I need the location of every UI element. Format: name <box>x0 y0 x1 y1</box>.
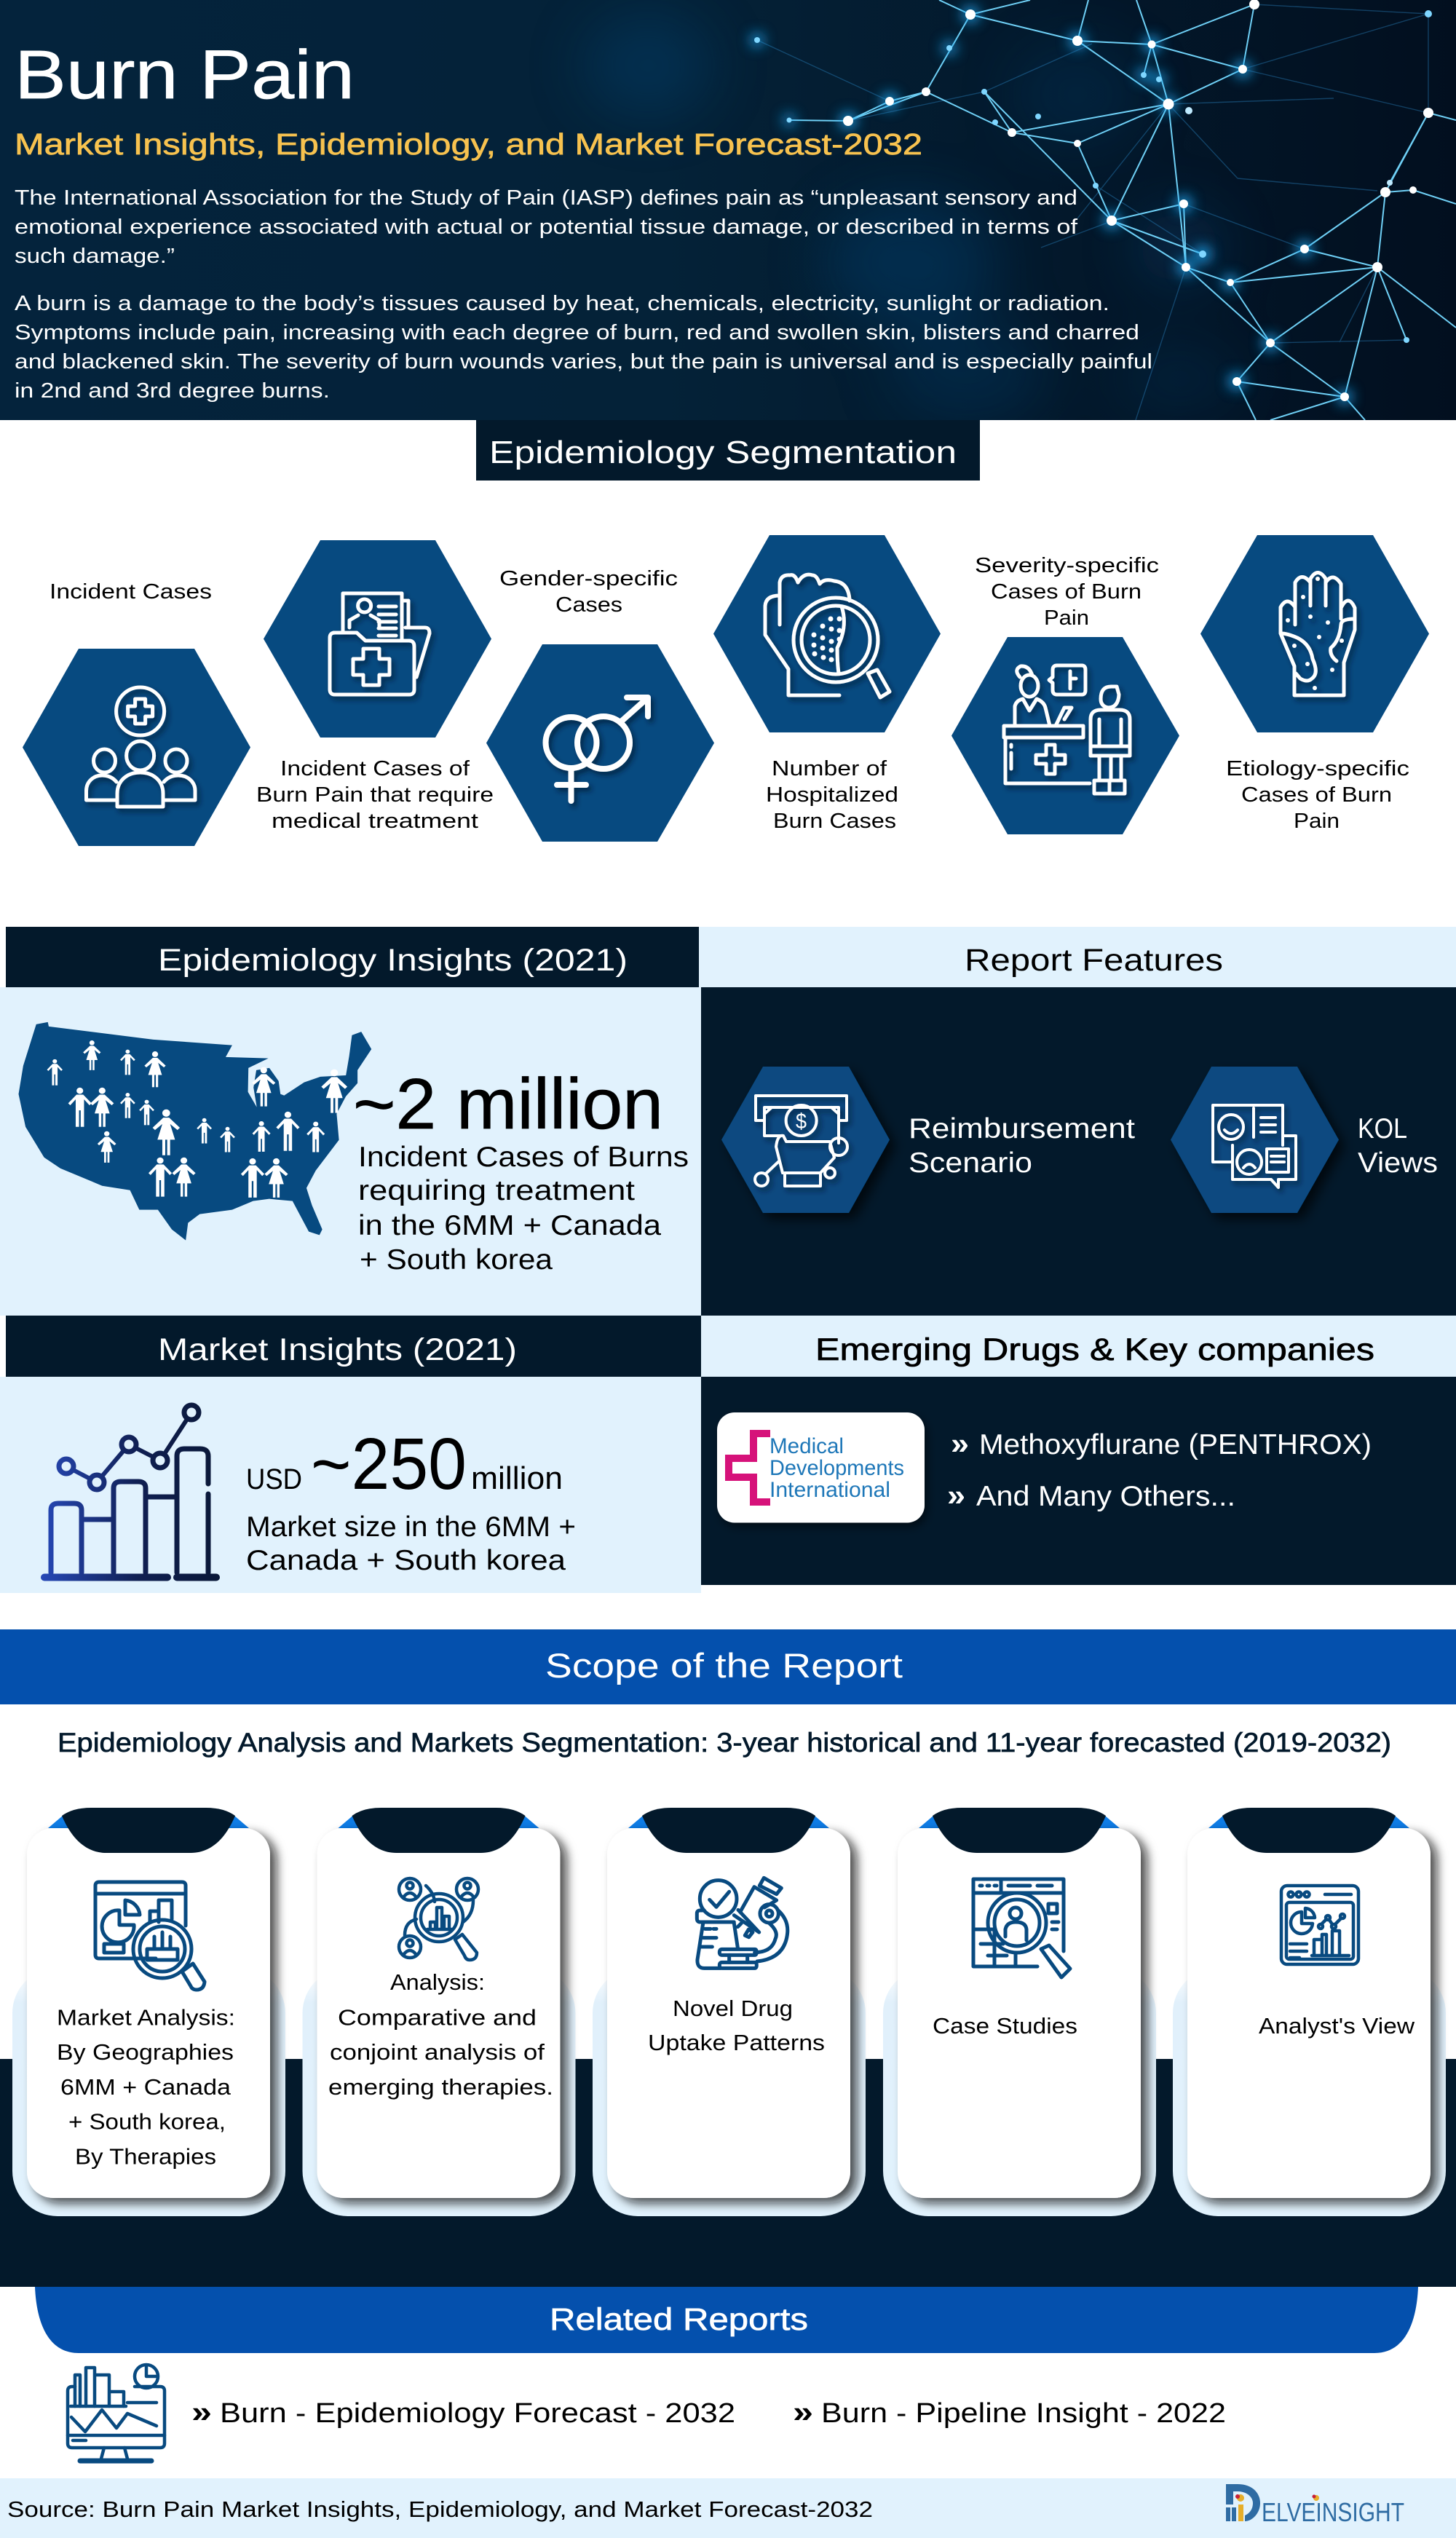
label: Reimbursement Scenario: Reimbursement <box>909 1113 1135 1145</box>
heading: Report Features: Report Features <box>965 943 1223 978</box>
label: Incident Cases of Burn Pain that require medical treatment: medical treatment <box>272 810 478 833</box>
heading: Epidemiology Insights: Epidemiology Insights (2021) <box>158 943 628 978</box>
label: Number of Hospitalized Burn Cases <box>766 757 898 833</box>
icon: cash dispenser with hand: $ <box>796 1110 807 1134</box>
text block: IASP definition: such damage.” <box>15 245 175 268</box>
panel: market insights <box>0 1316 701 1593</box>
text block: market size description: Market size in the 6MM + <box>246 1511 576 1543</box>
heading: Report Features <box>699 927 1456 987</box>
logo card: Medical Developments International: International <box>769 1478 890 1502</box>
label: Reimbursement Scenario: Scenario <box>909 1147 1032 1179</box>
text block: incident cases description: + South korea <box>360 1244 553 1276</box>
label: Etiology-specific Cases of Burn Pain: Cases of Burn <box>1241 783 1392 807</box>
text: market analysis details: 6MM + Canada <box>60 2074 232 2100</box>
banner: Related Reports <box>35 2287 1418 2353</box>
subtitle: Market Insights, Epidemiology, and Market Forecast-2032 <box>15 127 922 161</box>
list: related reports: » <box>191 2395 212 2429</box>
heading: Market Insights <box>6 1316 701 1377</box>
label: Gender-specific Cases: Cases <box>555 593 622 617</box>
list: related reports: Burn - Epidemiology Forecast - 2032 <box>220 2398 735 2429</box>
label: Severity-specific Cases of Burn Pain <box>975 554 1159 630</box>
icon: web page under magnifier <box>973 1879 1070 1977</box>
icon: feedback bubbles <box>1213 1105 1296 1187</box>
stat: USD ~250 million <box>246 1423 563 1505</box>
text: comparative analysis details: conjoint analysis of <box>330 2039 545 2065</box>
icon: gender symbols <box>546 697 648 801</box>
card: market analysis <box>12 1808 285 2216</box>
text: comparative analysis details: emerging therapies. <box>328 2074 553 2100</box>
icon: flask and microscope <box>697 1878 788 1968</box>
heading: Emerging Drugs and Key companies: Emerging Drugs & Key companies <box>815 1332 1374 1367</box>
logo: DelveInsight: ELVEINSIGHT <box>1262 2497 1404 2527</box>
label: Etiology-specific Cases of Burn Pain: Etiology-specific <box>1226 757 1409 780</box>
text block: incident cases description: Incident Cases of Burns <box>358 1142 689 1173</box>
card: comparative analysis <box>303 1808 575 2216</box>
label: Incident Cases of Burn Pain that require medical treatment <box>256 757 494 833</box>
hexagon: gender-specific cases <box>486 644 714 842</box>
label: Incident Cases of Burn Pain that require medical treatment: Burn Pain that require <box>256 783 494 807</box>
title: Burn Pain <box>15 36 355 114</box>
text block: market size description: Canada + South korea <box>246 1545 566 1576</box>
label: Number of Hospitalized Burn Cases: Number of <box>772 757 887 780</box>
icon: cash dispenser with hand <box>755 1096 847 1186</box>
panel: emerging drugs and key companies <box>701 1316 1456 1585</box>
text: market analysis details: + South korea, <box>68 2108 226 2135</box>
text block: incident cases description: in the 6MM + Canada <box>358 1210 661 1241</box>
text: market analysis details: By Geographies <box>57 2039 234 2065</box>
text block: burn description: in 2nd and 3rd degree burns. <box>15 379 330 403</box>
hexagon: etiology-specific cases <box>1200 535 1429 732</box>
label: Severity-specific Cases of Burn Pain: Pain <box>1044 606 1089 630</box>
text block: burn description: Symptoms include pain, increasing with each degree of burn, red and swollen skin, blisters and charred <box>15 321 1139 344</box>
map: United States with people <box>19 1022 371 1241</box>
text block: incident cases description: requiring treatment <box>358 1175 635 1206</box>
text block: incident cases description <box>358 1142 689 1276</box>
list: related reports: » <box>793 2395 813 2429</box>
banner: Scope of the Report: Scope of the Report <box>545 1646 903 1685</box>
heading: Epidemiology Segmentation <box>476 420 980 481</box>
footer <box>0 2478 1456 2538</box>
label: Gender-specific Cases <box>499 567 678 617</box>
label: Incident Cases of Burn Pain that require medical treatment: Incident Cases of <box>280 757 470 780</box>
stat: ~2 million: ~2 million <box>353 1064 663 1144</box>
icon: people and magnified chart <box>399 1878 478 1960</box>
panel: header background with network graphic <box>0 0 1456 422</box>
label: Reimbursement Scenario <box>909 1113 1135 1179</box>
label: Severity-specific Cases of Burn Pain: Severity-specific <box>975 554 1159 577</box>
text block: burn description: A burn is a damage to the body’s tissues caused by heat, chemicals, electricity, sunlight or radiation. <box>15 292 1109 315</box>
heading: Market Insights: Market Insights (2021) <box>158 1332 517 1367</box>
label: Etiology-specific Cases of Burn Pain <box>1226 757 1409 833</box>
label: Gender-specific Cases: Gender-specific <box>499 567 678 590</box>
label: Incident Cases: Incident Cases <box>50 580 212 604</box>
text: comparative analysis details <box>328 1969 553 2100</box>
label: Number of Hospitalized Burn Cases: Hospitalized <box>766 783 898 807</box>
feature: KOL views <box>1171 1067 1438 1213</box>
card: novel drug uptake <box>593 1808 866 2216</box>
text: market analysis details: Market Analysis: <box>57 2005 235 2030</box>
icon: hand under magnifier <box>765 574 890 697</box>
icon: monitor with charts <box>68 2365 165 2461</box>
heading: Emerging Drugs and Key companies <box>701 1316 1456 1377</box>
card: case studies <box>883 1808 1156 2216</box>
list: emerging drugs: » <box>951 1426 969 1460</box>
label: KOL Views <box>1358 1113 1438 1179</box>
list: emerging drugs <box>947 1426 1372 1512</box>
list: emerging drugs: » <box>947 1478 965 1512</box>
icon: bar chart with trend line <box>44 1405 216 1577</box>
list: related reports <box>191 2395 1226 2429</box>
text block: market size description <box>246 1511 576 1576</box>
text: comparative analysis details: Comparative and <box>338 2005 537 2030</box>
label: Etiology-specific Cases of Burn Pain: Pain <box>1294 810 1340 833</box>
feature: reimbursement scenario <box>721 1067 1135 1213</box>
logo card: Medical Developments International <box>717 1412 925 1523</box>
list: related reports: Burn - Pipeline Insight - 2022 <box>821 2398 1226 2429</box>
label: Severity-specific Cases of Burn Pain: Cases of Burn <box>991 580 1142 604</box>
text: market analysis details: By Therapies <box>75 2143 216 2170</box>
text block: IASP definition <box>15 186 1078 268</box>
icon: people with medical cross <box>86 687 195 807</box>
logo: DelveInsight <box>1226 2484 1404 2527</box>
list: emerging drugs: And Many Others... <box>976 1481 1235 1512</box>
banner: Scope of the Report <box>0 1629 1456 1704</box>
text: scope subtitle: Epidemiology Analysis and Markets Segmentation: 3-year historical and 11-year forecasted (2019-2032) <box>58 1728 1391 1758</box>
stat: USD ~250 million: ~250 <box>311 1423 467 1505</box>
banner: Related Reports: Related Reports <box>550 2302 808 2337</box>
hexagon: severity-specific cases <box>951 637 1179 834</box>
list: emerging drugs: Methoxyflurane (PENTHROX) <box>979 1429 1372 1460</box>
panel: epidemiology insights <box>0 927 701 1316</box>
label: Number of Hospitalized Burn Cases: Burn Cases <box>773 810 896 833</box>
text: novel drug uptake label: Novel Drug <box>673 1996 793 2021</box>
hexagon: hospitalized burn cases <box>713 535 941 732</box>
heading: Epidemiology Segmentation: Epidemiology Segmentation <box>489 435 957 470</box>
icon: reception desk <box>1004 665 1130 794</box>
card: analyst's view <box>1173 1808 1446 2216</box>
text block: burn description: and blackened skin. The severity of burn wounds varies, but the pain is universal and is especially painful <box>15 350 1152 373</box>
text: analyst's view label: Analyst's View <box>1259 2013 1415 2039</box>
text: novel drug uptake label: Uptake Patterns <box>648 2030 825 2055</box>
text: source: Source: Burn Pain Market Insights, Epidemiology, and Market Forecast-2032 <box>7 2497 873 2522</box>
icon: burned hand <box>1281 572 1355 695</box>
panel: report features <box>699 927 1456 1316</box>
text block: IASP definition: emotional experience associated with actual or potential tissue damage, or described in terms of <box>15 216 1078 239</box>
panel: dark band behind scope cards <box>0 2059 1456 2287</box>
text block: burn description <box>15 292 1152 403</box>
hexagon: incident cases <box>23 649 250 846</box>
text: market analysis details <box>57 2005 235 2170</box>
stat: USD ~250 million: USD <box>246 1463 302 1495</box>
icon: medical folder <box>330 593 430 695</box>
label: KOL Views: Views <box>1358 1147 1438 1179</box>
stat: USD ~250 million: million <box>471 1460 563 1496</box>
text block: IASP definition: The International Association for the Study of Pain (IASP) defines pain as “unpleasant sensory and <box>15 186 1077 210</box>
hexagon: treated cases <box>264 540 491 738</box>
icon: dashboard under magnifier <box>95 1882 205 1990</box>
logo card: Medical Developments International: Medical <box>769 1434 844 1458</box>
text: comparative analysis details: Analysis: <box>390 1969 485 1995</box>
heading: Epidemiology Insights <box>6 927 699 987</box>
logo card: Medical Developments International: Developments <box>769 1456 904 1480</box>
text: case studies label: Case Studies <box>933 2013 1077 2039</box>
text: novel drug uptake label <box>648 1996 825 2055</box>
label: KOL Views: KOL <box>1358 1113 1407 1145</box>
icon: analytics window <box>1281 1886 1358 1964</box>
